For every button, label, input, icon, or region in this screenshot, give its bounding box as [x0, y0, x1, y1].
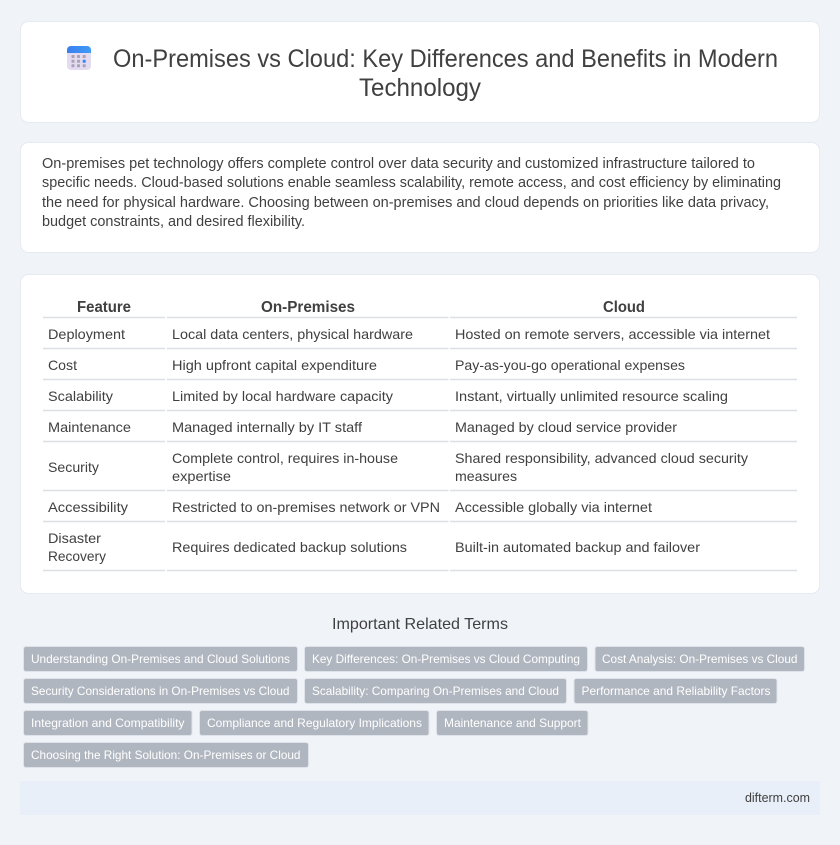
row: security: Shared responsibility, advanced cloud security: [455, 450, 748, 466]
title: [113, 45, 778, 102]
title: On-Premises vs Cloud: Key Differences and Benefits in Modern: [113, 45, 778, 73]
table header row: Feature: [77, 299, 131, 316]
row: maintenance: Managed by cloud service provider: [455, 419, 677, 435]
row: scalability: Instant, virtually unlimited resource scaling: [455, 388, 728, 404]
row: accessibility: [48, 499, 652, 515]
row: cost: Cost: [48, 357, 77, 373]
row: security: [48, 450, 748, 484]
tag list: Compliance and Regulatory Implications: [207, 716, 422, 730]
row: cost: High upfront capital expenditure: [172, 357, 377, 373]
panel: header: [20, 22, 820, 122]
title: Technology: [359, 74, 481, 102]
tag list: Choosing the Right Solution: On-Premises or Cloud: [31, 748, 300, 762]
tag list: [24, 646, 804, 768]
row: security: measures: [455, 468, 517, 484]
table header row: Cloud: [603, 299, 645, 316]
table header row: [77, 299, 645, 316]
panel: introduction: [20, 142, 820, 252]
row: deployment: Local data centers, physical hardware: [172, 326, 413, 342]
row: deployment: Deployment: [48, 326, 125, 342]
row: maintenance: Maintenance: [48, 419, 131, 435]
tag list: Scalability: Comparing On-Premises and Cloud: [312, 684, 559, 698]
row: maintenance: [48, 419, 677, 435]
intro text: [42, 156, 781, 230]
row: scalability: Limited by local hardware capacity: [172, 388, 393, 404]
row: deployment: [48, 326, 770, 342]
footer: [20, 781, 820, 815]
intro text: the need for physical hardware. Choosing between on-premises and cloud depends on priorities like data privacy,: [42, 195, 769, 211]
tag list: Understanding On-Premises and Cloud Solutions: [31, 652, 290, 666]
table grid lines: [43, 318, 797, 570]
row: scalability: [48, 388, 728, 404]
table header row: On-Premises: [261, 299, 355, 316]
row: deployment: Hosted on remote servers, accessible via internet: [455, 326, 770, 342]
row: cost: [48, 357, 685, 373]
intro text: budget constraints, and desired flexibility.: [42, 214, 305, 230]
row: security: expertise: [172, 468, 231, 484]
tag list: Performance and Reliability Factors: [582, 684, 770, 698]
row: security: Security: [48, 459, 99, 475]
row: disaster recovery: Built-in automated backup and failover: [455, 539, 700, 555]
row: accessibility: Restricted to on-premises network or VPN: [172, 499, 440, 515]
row: accessibility: Accessibility: [48, 499, 128, 515]
intro text: specific needs. Cloud-based solutions enable seamless scalability, remote access, and cost efficiency by eliminating: [42, 175, 781, 191]
row: disaster recovery: [48, 530, 700, 564]
row: cost: Pay-as-you-go operational expenses: [455, 357, 685, 373]
row: accessibility: Accessible globally via internet: [455, 499, 652, 515]
tag list: Maintenance and Support: [444, 716, 582, 730]
row: maintenance: Managed internally by IT staff: [172, 419, 362, 435]
row: disaster recovery: Requires dedicated backup solutions: [172, 539, 407, 555]
tag list: Key Differences: On-Premises vs Cloud Computing: [312, 652, 580, 666]
icon: calendar: [67, 46, 91, 70]
intro text: On-premises pet technology offers complete control over data security and customized infrastructure tailored to: [42, 156, 755, 172]
tag list: Security Considerations in On-Premises vs Cloud: [31, 684, 290, 698]
tag list: Integration and Compatibility: [31, 716, 184, 730]
heading: important related terms: Important Related Terms: [332, 616, 508, 633]
tag list: Cost Analysis: On-Premises vs Cloud: [602, 652, 798, 666]
row: disaster recovery: Disaster: [48, 530, 101, 546]
row: disaster recovery: Recovery: [48, 548, 106, 564]
panel: comparison table: [20, 274, 820, 594]
row: scalability: Scalability: [48, 388, 113, 404]
row: security: Complete control, requires in-house: [172, 450, 398, 466]
footer: difterm.com: [745, 790, 810, 805]
